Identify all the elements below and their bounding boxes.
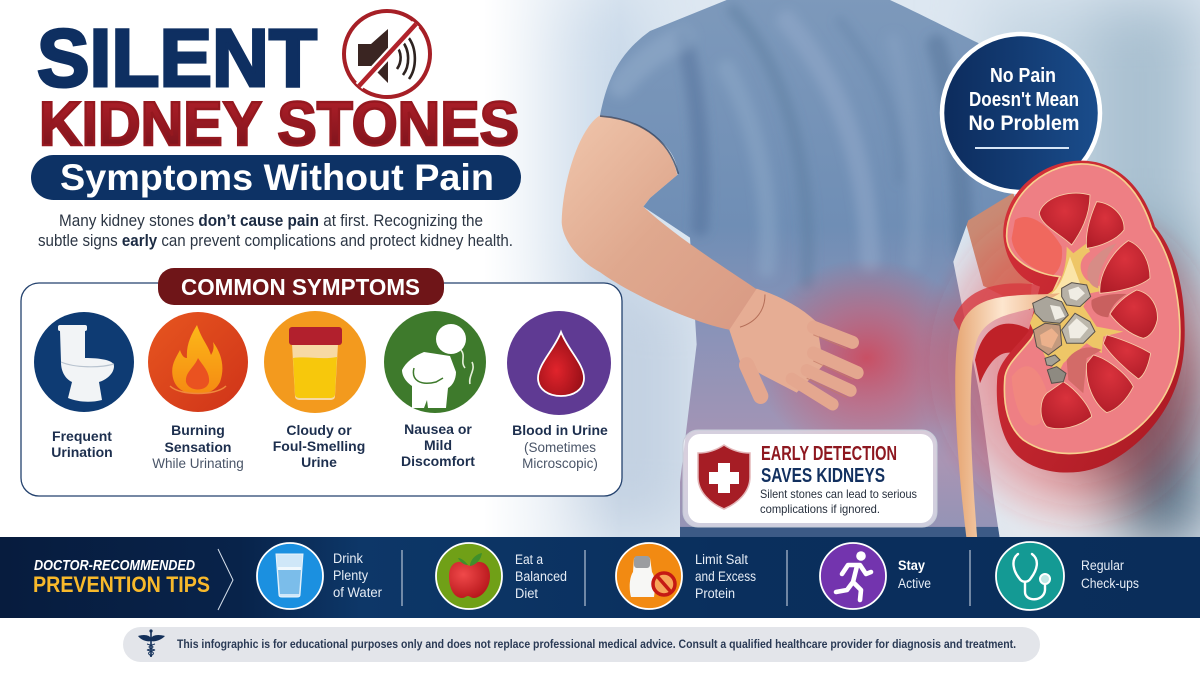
tip: drink water: of Water <box>333 585 382 600</box>
symptom: blood in urine: Blood in Urine <box>512 422 608 438</box>
badge: no pain doesn't mean no problem: No Pain <box>990 64 1056 87</box>
heading: doctor-recommended prevention tips <box>33 558 210 597</box>
intro text <box>38 212 513 250</box>
background: blurred clinic scene <box>0 0 1200 540</box>
symptom: nausea or mild discomfort: Mild <box>424 437 452 453</box>
kidney cortex <box>1004 164 1180 454</box>
tip: stay active <box>820 543 931 609</box>
symptom: blood in urine: (Sometimes <box>524 440 596 455</box>
tip: limit salt: and Excess <box>695 569 756 584</box>
renal pelvis <box>1030 243 1123 373</box>
badge: no pain doesn't mean no problem <box>942 34 1100 192</box>
disclaimer bar: This infographic is for educational purposes only and does not replace professional medical advice. Consult a qualified healthcare provider for diagnosis and treatment. <box>177 637 1016 651</box>
tip: regular check-ups <box>996 542 1139 610</box>
tip: drink water <box>257 543 382 609</box>
tip: drink water: Plenty <box>333 568 368 583</box>
symptom: burning sensation: Burning <box>171 422 225 438</box>
symptom: cloudy or foul-smelling urine: Urine <box>301 454 337 470</box>
tip: limit salt <box>616 543 756 609</box>
prevention tips band <box>0 537 1200 618</box>
tip: regular check-ups: Regular <box>1081 558 1124 573</box>
sleeve cuff edge <box>600 116 678 174</box>
callout: early detection saves kidneys: complications if ignored. <box>760 502 880 516</box>
tip: drink water: Drink <box>333 551 363 566</box>
tip: stay active: Stay <box>898 557 925 573</box>
heading: doctor-recommended prevention tips: DOCTOR-RECOMMENDED <box>34 558 195 574</box>
symptom: nausea or mild discomfort <box>384 311 486 469</box>
tip: limit salt: Limit Salt <box>695 552 748 567</box>
callout: early detection saves kidneys: Silent stones can lead to serious <box>760 487 917 501</box>
symptom: nausea or mild discomfort: Discomfort <box>401 453 475 469</box>
tip: balanced diet: Eat a <box>515 552 543 567</box>
symptom: frequent urination: Urination <box>51 444 113 460</box>
title: kidney stones: KIDNEY STONES <box>39 90 519 159</box>
symptom: cloudy or foul-smelling urine: Cloudy or <box>286 422 352 438</box>
red pain glow on shirt <box>766 267 959 434</box>
symptom: cloudy or foul-smelling urine <box>264 311 366 470</box>
symptom: cloudy or foul-smelling urine: Foul-Smelling <box>273 438 365 454</box>
hand <box>729 289 857 404</box>
heading: common symptoms <box>158 268 444 305</box>
shirt folds <box>620 10 963 282</box>
symptom: burning sensation: Sensation <box>165 439 231 455</box>
callout: early detection saves kidneys <box>683 430 937 527</box>
badge: no pain doesn't mean no problem: Doesn't Mean <box>969 88 1079 111</box>
symptom: burning sensation: While Urinating <box>152 456 244 471</box>
tip: balanced diet: Diet <box>515 586 538 601</box>
badge: no pain doesn't mean no problem: No Problem <box>968 111 1080 135</box>
tip: limit salt: Protein <box>695 586 735 601</box>
tip: stay active: Active <box>898 576 931 591</box>
symptom: frequent urination <box>34 312 134 460</box>
renal vessels <box>953 283 1053 350</box>
icon: crossed-out speaker <box>344 11 430 97</box>
panel: common symptoms <box>21 268 622 496</box>
arrow: chevron <box>218 549 233 610</box>
title: silent: SILENT <box>37 13 317 104</box>
left arm <box>562 115 757 330</box>
callout: early detection saves kidneys: EARLY DETECTION <box>761 443 897 465</box>
jeans <box>680 526 1000 537</box>
medullary pyramids <box>1039 193 1157 429</box>
symptom: blood in urine <box>507 311 611 471</box>
symptom: frequent urination: Frequent <box>52 428 112 444</box>
subtitle pill: Symptoms Without Pain <box>60 157 494 198</box>
heading: common symptoms: COMMON SYMPTOMS <box>181 274 420 300</box>
icon: caduceus <box>138 629 165 657</box>
callout: early detection saves kidneys: SAVES KIDNEYS <box>761 465 885 487</box>
tip: balanced diet <box>436 543 567 609</box>
intro text: Many kidney stones don’t cause pain at first. Recognizing the <box>59 212 483 230</box>
person: back with hand on lower back <box>562 0 1033 544</box>
heading: doctor-recommended prevention tips: PREVENTION TIPS <box>33 572 210 597</box>
stones <box>1033 283 1095 383</box>
tip: regular check-ups: Check-ups <box>1081 576 1139 591</box>
ureter <box>955 293 1060 540</box>
disclaimer bar <box>123 627 1040 662</box>
symptom: burning sensation <box>148 312 248 471</box>
symptom: blood in urine: Microscopic) <box>522 456 598 471</box>
right upper arm <box>963 193 1033 310</box>
symptom: nausea or mild discomfort: Nausea or <box>404 421 472 437</box>
kidney illustration with stones <box>920 161 1200 540</box>
t-shirt <box>597 0 1030 544</box>
intro text: subtle signs early can prevent complications and protect kidney health. <box>38 232 513 250</box>
kidney outer wall <box>997 161 1185 473</box>
icon: medical shield <box>698 445 750 509</box>
tip: balanced diet: Balanced <box>515 569 567 584</box>
